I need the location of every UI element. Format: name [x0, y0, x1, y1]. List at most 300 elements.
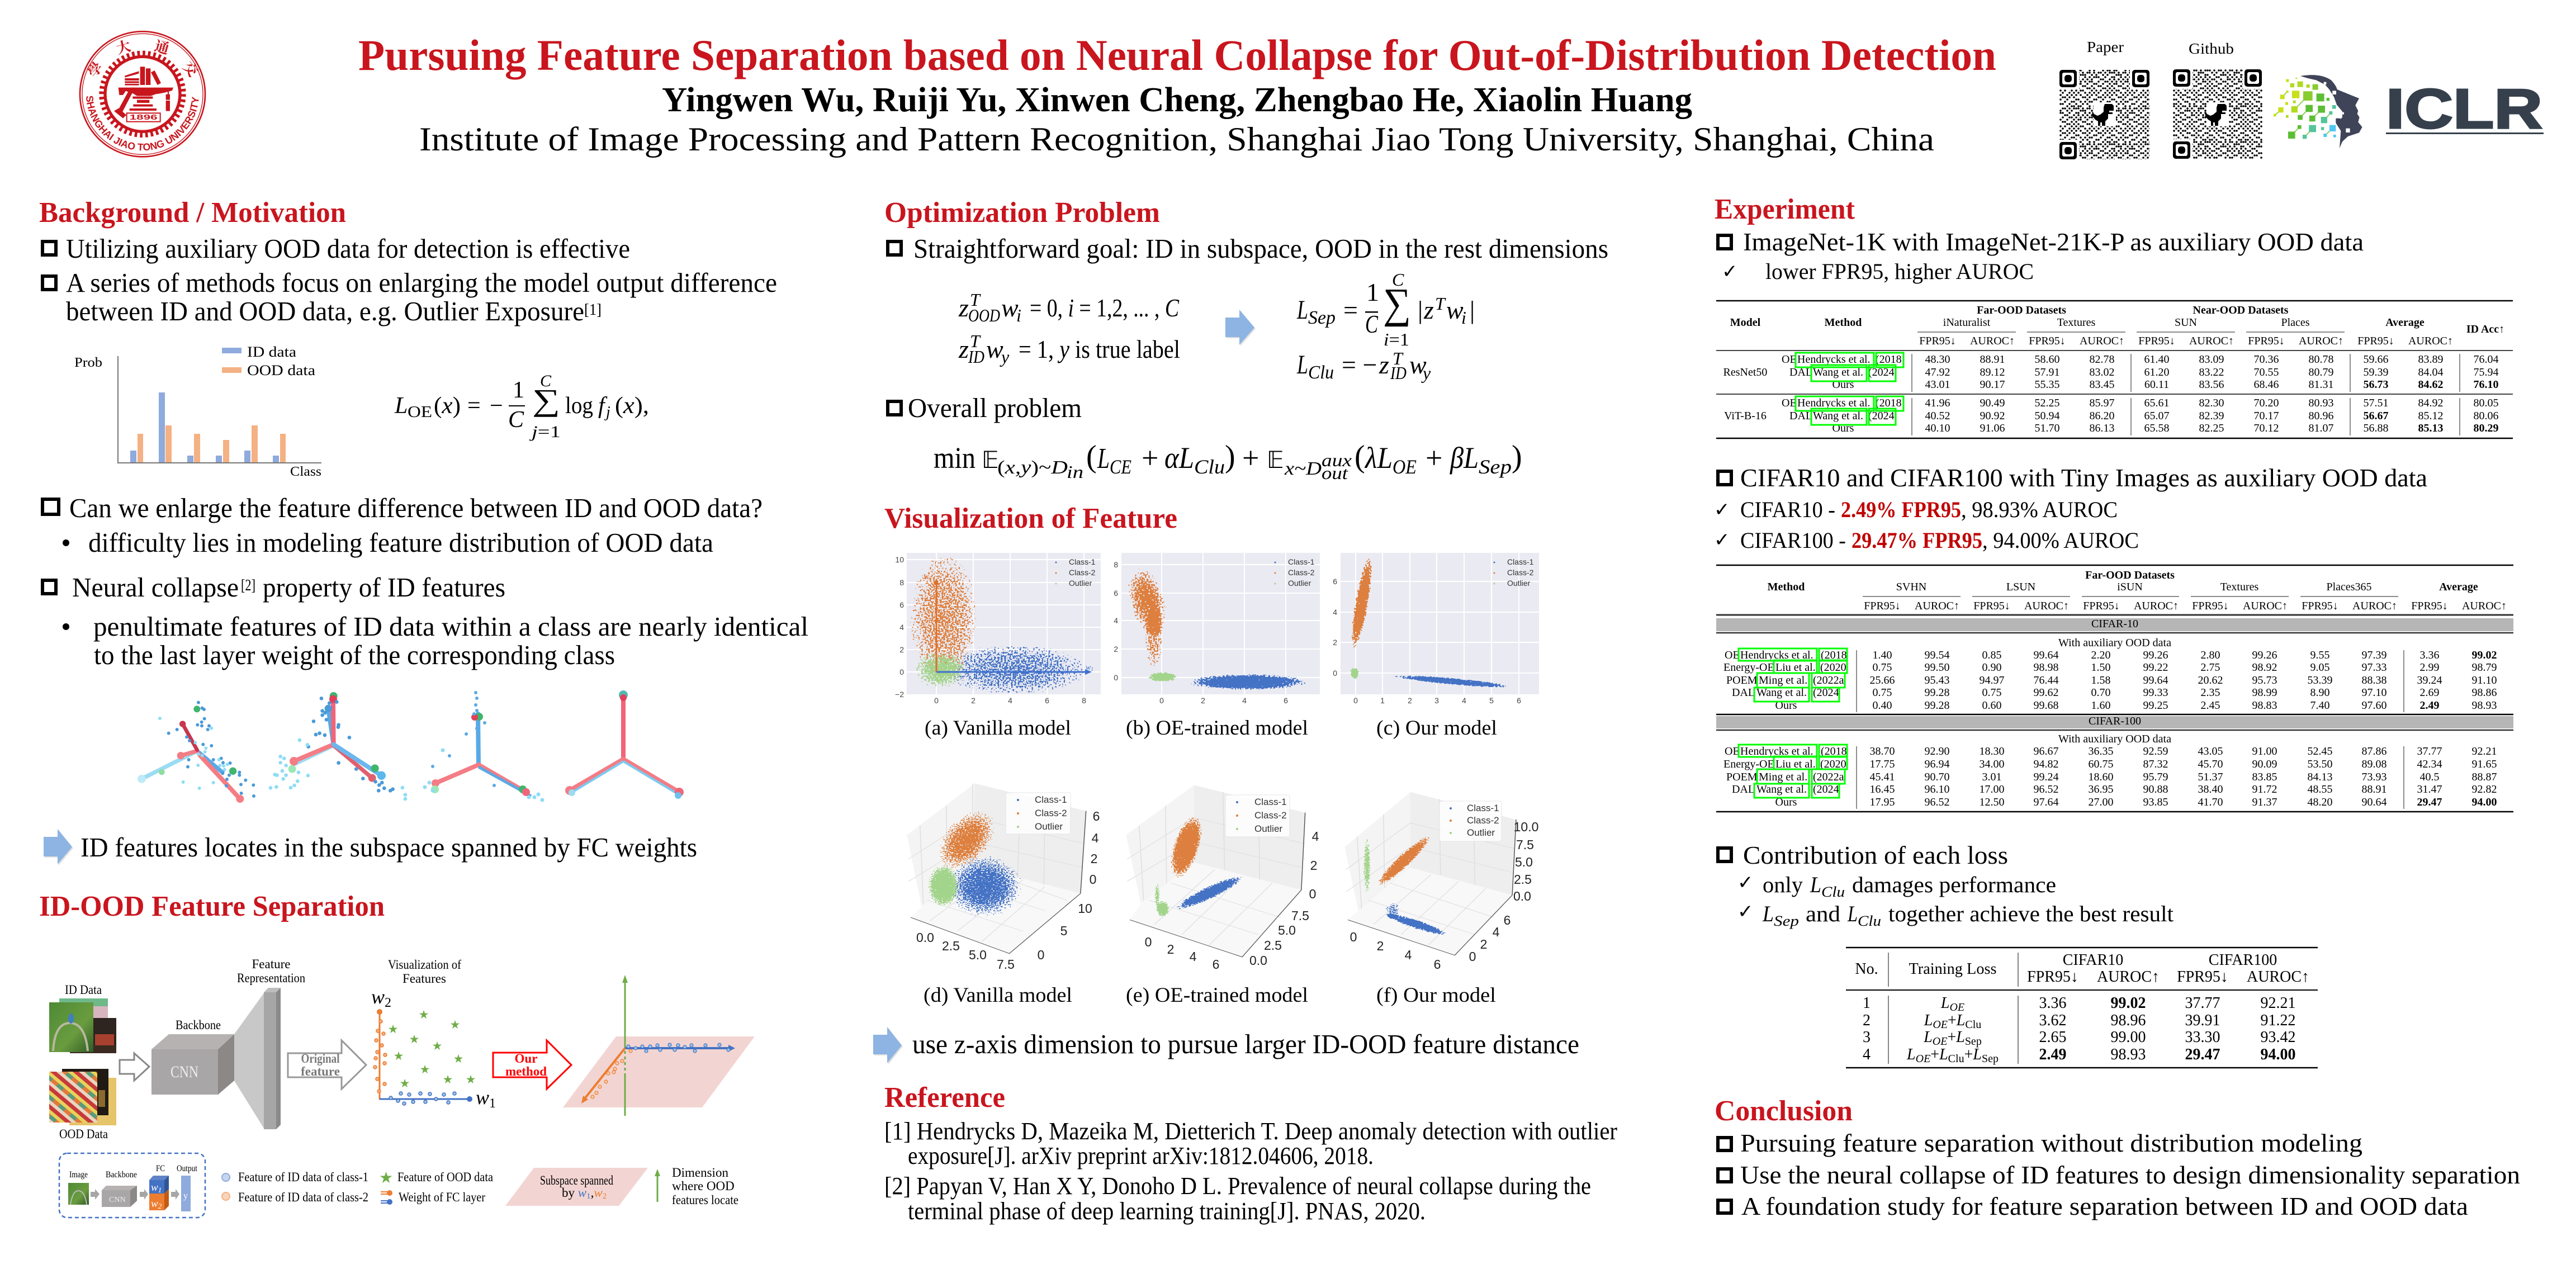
table: CIFAR results: 92.59 [2143, 745, 2168, 757]
logo: Shanghai Jiao Tong University seal: SHANGHAI JIAO TONG UNIVERSITY [86, 96, 199, 151]
bullet: series of methods: between ID and OOD data, e.g. Outlier Exposure [66, 296, 584, 326]
table: ImageNet results: 65.61 [2144, 397, 2169, 409]
chart: feature scatter with stars: ★ [419, 1008, 429, 1021]
table: CIFAR results: 41.70 [2198, 796, 2223, 808]
table: ImageNet results: 56.88 [2364, 422, 2388, 434]
table: ImageNet results: 57.51 [2364, 397, 2388, 409]
table: ImageNet results: (2018 [1876, 353, 1902, 366]
table: ImageNet results: 80.06 [2473, 410, 2499, 422]
3D scatter plot d: vanilla: 2 [1091, 851, 1097, 866]
legend entry: OOD dimension: where OOD [672, 1179, 735, 1193]
table: ImageNet results: AUROC↑ [2408, 335, 2453, 347]
table: ImageNet results: Model [1730, 316, 1761, 329]
table: ImageNet results: 41.96 [1925, 397, 1950, 409]
table: CIFAR results: 2.75 [2200, 661, 2220, 674]
legend entry: subspace: w [594, 1186, 603, 1200]
table: CIFAR results: With auxiliary OOD data [2058, 637, 2171, 649]
formula: L_OE: log [565, 393, 593, 419]
legend entry: subspace: 2 [603, 1192, 607, 1201]
table: loss contribution: Clu [1948, 1053, 1964, 1065]
label: OOD Data: OOD Data [59, 1127, 108, 1141]
figure: neural collapse tripods [138, 690, 684, 803]
3D scatter plot e: OE-trained: Class-1 [1254, 797, 1287, 807]
bullet: series of methods: A series of methods focus on enlarging the model output difference [66, 267, 777, 298]
table: CIFAR results: 94.82 [2034, 758, 2058, 770]
table: loss contribution: 37.77 [2185, 995, 2220, 1012]
inset: network structure: w [151, 1198, 158, 1210]
table: CIFAR results: 96.52 [1924, 796, 1950, 808]
scatter plot a: vanilla: 6 [899, 600, 904, 609]
table: CIFAR results: 38.70 [1869, 745, 1895, 757]
table: CIFAR results: 92.82 [2472, 783, 2497, 795]
formula: ID constraint: w [986, 335, 1003, 363]
label: Feature Representation [237, 957, 305, 985]
table: CIFAR results: OE [1725, 745, 1740, 757]
table: CIFAR results: AUROC↑ [2352, 600, 2397, 612]
formula: L_OE: j=1 [529, 423, 561, 441]
3D scatter plot e: OE-trained: 0 [1309, 887, 1316, 901]
reference 2 [884, 1172, 1591, 1225]
scatter plot b: OE-trained: 6 [1284, 696, 1288, 705]
table: CIFAR results: 1.50 [2091, 661, 2111, 674]
check: CIFAR10 result: 2.49% FPR95 [1841, 497, 1961, 522]
tripod 3 [425, 693, 542, 800]
table: CIFAR results: FPR95↓ [1864, 600, 1901, 612]
formula: ID constraint: z [958, 335, 969, 363]
formula: ID constraint: y [1000, 347, 1010, 367]
table: CIFAR results: Ours [1775, 699, 1797, 712]
formula: L_OE: C [508, 407, 524, 433]
table: loss contribution: 39.91 [2185, 1012, 2220, 1029]
bullet: neural collapse [42, 572, 505, 603]
formula: L_OE: j [604, 404, 610, 421]
table: CIFAR results: 93.85 [2143, 796, 2168, 808]
table: CIFAR results: 37.77 [2417, 745, 2442, 757]
table: CIFAR results: 8.90 [2310, 686, 2330, 699]
formula: L_Sep: = [1343, 296, 1358, 324]
check: CIFAR100 result [1714, 528, 2139, 553]
formula: L_OE: (x), [615, 393, 649, 419]
table: loss contribution: L [1939, 1046, 1948, 1063]
table: CIFAR results: 2.49 [2419, 699, 2440, 712]
formula: L_OE: L [394, 393, 408, 419]
bullet: ImageNet: ImageNet-1K with ImageNet-21K-P as auxiliary OOD data [1743, 228, 2364, 256]
table: CIFAR results: 99.25 [2143, 699, 2168, 712]
table: loss contribution: 98.96 [2111, 1012, 2146, 1029]
scatter plot c: our model: 0 [1353, 696, 1358, 705]
table: CIFAR results: CIFAR-100 [2089, 715, 2141, 727]
table: CIFAR results: Ours [1775, 796, 1797, 808]
table: ImageNet results [1716, 301, 2513, 438]
table: ImageNet results: DAL [1789, 366, 1812, 378]
logo: Shanghai Jiao Tong University seal: 交 [179, 56, 204, 81]
table: CIFAR results: 0.70 [2091, 686, 2111, 699]
bullet: overall problem: Overall problem [908, 392, 1082, 423]
formula: L_Clu: ID [1390, 363, 1407, 383]
reference 1 [884, 1117, 1617, 1169]
table: CIFAR results: 94.00 [2472, 796, 2497, 808]
table: ImageNet results: 83.22 [2199, 366, 2224, 378]
table: CIFAR results: (2022a [1813, 771, 1844, 783]
table: CIFAR results: 7.40 [2310, 699, 2330, 712]
table: CIFAR results: AUROC↑ [2462, 600, 2507, 612]
table: loss contribution: Training Loss [1909, 960, 1997, 978]
table: CIFAR results: 36.95 [2089, 783, 2113, 795]
table: CIFAR results: Ming et al. [1759, 771, 1807, 783]
table: CIFAR results: 3.36 [2419, 649, 2440, 661]
table: CIFAR results: 98.92 [2252, 661, 2277, 674]
logo: ICLR head [2274, 75, 2362, 148]
formula: OOD constraint: i [1016, 305, 1021, 325]
formula: L_Clu: z [1379, 351, 1389, 379]
scatter plot b: OE-trained: 2 [1201, 696, 1205, 705]
table: CIFAR results: DAL [1732, 783, 1755, 795]
check: L_Sep and L_Clu [1737, 901, 2174, 929]
table: CIFAR results: Average [2439, 581, 2478, 593]
3D scatter plot e: OE-trained: 2 [1310, 858, 1317, 873]
legend entry: OOD dimension: Dimension [672, 1166, 728, 1180]
check: lower FPR95: lower FPR95, higher AUROC [1765, 259, 2034, 284]
formula: overall objective: ) [1225, 439, 1235, 474]
formula: overall objective: min [934, 441, 976, 475]
table: CIFAR results: DAL [1732, 686, 1755, 699]
check: CIFAR100 result: , 94.00% AUROC [1982, 528, 2139, 553]
table: CIFAR results: 0.75 [1982, 686, 2001, 699]
formula: OOD constraint [958, 290, 1180, 325]
check: CIFAR10 result: CIFAR10 - [1740, 497, 1835, 522]
table: CIFAR results: 0.40 [1873, 699, 1892, 712]
label: Feature Representation: Representation [237, 971, 305, 985]
table: ImageNet results: Near-OOD Datasets [2193, 304, 2289, 316]
reference 1: [1] Hendrycks D, Mazeika M, Dietterich T. Deep anomaly detection with outlier [884, 1117, 1617, 1145]
chart: feature scatter with stars: ★ [453, 1052, 463, 1066]
formula: L_Clu: y [1421, 363, 1431, 383]
scatter plot b: OE-trained: Class-2 [1288, 568, 1315, 577]
scatter plot c: our model: 5 [1489, 696, 1494, 705]
QR code: github [2172, 68, 2264, 160]
panel: Conclusion [1715, 1095, 2520, 1220]
table: ImageNet results: Ours [1832, 422, 1854, 434]
table: ImageNet results: 85.12 [2418, 410, 2443, 422]
table: ImageNet results: SUN [2175, 316, 2197, 329]
formula: overall objective: ( [1086, 439, 1097, 474]
scatter plot c: our model: 4 [1462, 696, 1466, 705]
table: CIFAR results: 45.70 [2198, 758, 2223, 770]
3D scatter plot f: our model: 4 [1493, 925, 1500, 939]
table: ImageNet results: 88.91 [1980, 353, 2005, 366]
3D scatter plot d: vanilla: 4 [1092, 831, 1099, 845]
table: ImageNet results: 82.30 [2199, 397, 2224, 409]
legend entries: features: ★ [379, 1168, 393, 1187]
arrow: hollow input [120, 1053, 149, 1081]
table: loss contribution: Sep [1965, 1035, 1982, 1048]
table: ImageNet results: 59.66 [2364, 353, 2388, 366]
table: CIFAR results: 97.39 [2361, 649, 2387, 661]
formula: L_OE: (x) [434, 393, 461, 419]
table: loss contribution: L [1955, 1029, 1965, 1046]
table: loss contribution: CIFAR10 [2063, 951, 2123, 969]
legend entry: subspace: Subspace spanned [540, 1173, 613, 1187]
table: CIFAR results: 99.50 [1924, 661, 1950, 674]
table: CIFAR results: 16.45 [1869, 783, 1895, 795]
table: ImageNet results: 76.04 [2473, 353, 2499, 366]
check: only L_Clu: ✓ [1737, 872, 1753, 894]
heading: ID-OOD Feature Separation [39, 891, 385, 922]
table: CIFAR results: 17.95 [1869, 796, 1895, 808]
scatter plot a: vanilla: w [924, 572, 929, 581]
check: CIFAR10 result: ✓ [1714, 499, 1730, 521]
table: CIFAR results: 91.72 [2252, 783, 2277, 795]
table: ImageNet results: Hendrycks et al. [1797, 353, 1871, 366]
formula: L_Sep: | [1470, 296, 1475, 324]
legend entry: OOD dimension: features locate [672, 1193, 738, 1207]
formula: L_Sep: C [1392, 269, 1404, 290]
table: ImageNet results: Wang et al. [1813, 410, 1863, 422]
formula: L_OE: f [598, 393, 608, 419]
formula: L_Clu: L [1296, 350, 1308, 380]
formula: overall objective: aux [1322, 450, 1352, 470]
3D scatter plot f: our model: Outlier [1467, 827, 1495, 838]
panel: Visualization of Feature [873, 503, 1579, 1064]
3D scatter plot d: vanilla: 2.5 [942, 939, 960, 953]
formula: overall objective: + [1142, 441, 1158, 475]
table: CIFAR results: 9.05 [2310, 661, 2330, 674]
table: CIFAR results: 38.40 [2198, 783, 2223, 795]
check: only L_Clu [1737, 872, 2056, 900]
table: ImageNet results: OE [1782, 353, 1797, 366]
title: Pursuing Feature Separation based on Neural Collapse for Out-of-Distribution Detection [358, 31, 1996, 79]
table: CIFAR results: 18.60 [2089, 771, 2113, 783]
table: ImageNet results: 56.67 [2364, 410, 2388, 422]
bullet: foundation study: A foundation study for feature separation between ID and OOD data [1741, 1192, 2468, 1220]
formula: overall objective: out [1322, 463, 1348, 483]
table: CIFAR results: 94.97 [1979, 674, 2005, 686]
inset: network structure: y [183, 1191, 188, 1201]
heading: Reference [884, 1082, 1005, 1114]
formula: L_Sep: T [1435, 293, 1446, 314]
3D scatter plot d: vanilla: 10 [1078, 901, 1092, 916]
table: ImageNet results: OE [1782, 397, 1797, 409]
logo: Shanghai Jiao Tong University seal [79, 31, 206, 158]
scatter plot a: vanilla: 2 [899, 645, 904, 654]
tripod 4 [565, 690, 684, 799]
3D scatter plot f: our model: 6 [1434, 957, 1441, 972]
table: CIFAR results: 99.62 [2034, 686, 2058, 699]
table: loss contribution [1846, 948, 2318, 1068]
table: CIFAR results: Energy-OE [1723, 661, 1774, 674]
logo: Shanghai Jiao Tong University seal: 通 [153, 35, 172, 58]
legend: pipeline key [59, 1153, 738, 1218]
table: CIFAR results: (2018 [1821, 745, 1847, 757]
table: CIFAR results: 99.24 [2034, 771, 2058, 783]
table: CIFAR results: 98.99 [2252, 686, 2277, 699]
table: CIFAR results: Ming et al. [1759, 674, 1807, 686]
table: CIFAR results: 95.79 [2143, 771, 2168, 783]
check: lower FPR95: ✓ [1722, 261, 1737, 283]
table: CIFAR results: 52.45 [2308, 745, 2332, 757]
table: CIFAR results: 99.28 [1924, 699, 1950, 712]
check: only L_Clu: L [1810, 872, 1821, 897]
3D scatter plot e: OE-trained: 4 [1312, 829, 1319, 844]
table: CIFAR results: 3.01 [1982, 771, 2001, 783]
arrow: subspace conclusion [44, 829, 73, 865]
table: ImageNet results: 89.12 [1980, 366, 2005, 378]
scatter plot a: vanilla: 6 [1045, 696, 1049, 705]
legend entry: subspace: by w [562, 1186, 586, 1200]
formula: L_Clu: Clu [1308, 362, 1334, 383]
formula: L_Sep: i=1 [1384, 329, 1409, 349]
table: ImageNet results: 90.17 [1980, 378, 2005, 391]
table: loss contribution: 3 [1863, 1029, 1871, 1046]
bar chart: class probabilities: Class [290, 465, 321, 479]
table: ImageNet results: 58.60 [2035, 353, 2059, 366]
formula: OOD constraint: = 0, i = 1,2, ... , C [1030, 293, 1180, 322]
table: loss contribution: + [1947, 1029, 1956, 1046]
table: ImageNet results: DAL [1789, 410, 1812, 422]
table: ImageNet results: 84.62 [2418, 378, 2443, 391]
label: ID Data: ID Data [65, 983, 102, 997]
table: loss contribution: Clu [1965, 1019, 1981, 1031]
chart: feature scatter with stars: 2 [385, 996, 391, 1010]
legend entries: features [222, 1168, 493, 1205]
table: CIFAR results: Far-OOD Datasets [2085, 569, 2175, 581]
formula: L_OE: − [490, 393, 503, 419]
heading: Conclusion [1715, 1095, 1853, 1127]
formula: overall objective: 𝔼 [1267, 446, 1284, 473]
logo: Shanghai Jiao Tong University seal: 1896 [130, 113, 158, 121]
reference 2: terminal phase of deep learning training[J]. PNAS, 2020. [908, 1197, 1426, 1225]
panel: Experiment [1714, 193, 2513, 1068]
table: CIFAR results: 2.20 [2091, 649, 2111, 661]
table: ImageNet results: 82.39 [2199, 410, 2224, 422]
table: CIFAR results: Places365 [2326, 581, 2372, 593]
table: CIFAR results: 99.26 [2252, 649, 2277, 661]
check: only L_Clu: damages performance [1852, 872, 2056, 897]
formula: L_Clu: T [1393, 348, 1404, 368]
formula: L_Clu [1296, 348, 1431, 383]
table: CIFAR results: 53.50 [2308, 758, 2332, 770]
table: CIFAR results: Hendrycks et al. [1740, 649, 1813, 661]
3D scatter plot e: OE-trained: 7.5 [1291, 908, 1309, 923]
table: loss contribution: L [1956, 1012, 1965, 1029]
chart: feature scatter with stars: ★ [420, 1063, 430, 1076]
table: CIFAR results: 90.88 [2143, 783, 2168, 795]
table: CIFAR results: 96.52 [2034, 783, 2058, 795]
text: ID features subspace: ID features locates in the subspace spanned by FC weights [80, 832, 697, 863]
table: CIFAR results: 17.75 [1869, 758, 1895, 770]
table: CIFAR results: AUROC↑ [1915, 600, 1959, 612]
table: CIFAR results: SVHN [1896, 581, 1926, 593]
table: CIFAR results: 97.60 [2361, 699, 2387, 712]
table: CIFAR results: 60.75 [2089, 758, 2113, 770]
table: CIFAR results: 99.68 [2034, 699, 2058, 712]
table: CIFAR results: Hendrycks et al. [1740, 745, 1813, 757]
table: CIFAR results: FPR95↓ [2192, 600, 2229, 612]
chart: feature scatter with stars [371, 986, 496, 1111]
table: ImageNet results: AUROC↑ [2299, 335, 2343, 347]
scatter plot b: OE-trained: 0 [1159, 696, 1164, 705]
table: loss contribution: 3.36 [2039, 995, 2066, 1012]
table: CIFAR results: 98.83 [2252, 699, 2277, 712]
formula: overall objective: in [1067, 462, 1083, 482]
scatter plot b: OE-trained: 4 [1114, 616, 1118, 625]
table: CIFAR results: 0.75 [1873, 661, 1892, 674]
formula: L_Sep: z [1423, 296, 1434, 324]
table: loss contribution: L [1923, 1029, 1933, 1046]
scatter plot a: vanilla: 4 [899, 623, 904, 632]
bar chart: class probabilities: Prob [74, 356, 102, 370]
logo: ICLR wordmark: ICLR [2386, 78, 2542, 140]
formula: L_Sep: 1 [1366, 278, 1379, 306]
table: CIFAR results: 98.86 [2472, 686, 2497, 699]
caption d: (d) Vanilla model [924, 984, 1072, 1007]
table: CIFAR results: 0.90 [1982, 661, 2001, 674]
formula: overall objective: αL [1164, 441, 1194, 475]
table: loss contribution: 4 [1863, 1046, 1871, 1063]
reference 2: [2] Papyan V, Han X Y, Donoho D L. Prevalence of neural collapse during the [884, 1172, 1591, 1200]
chart: feature scatter with stars: ★ [388, 1022, 398, 1036]
3D scatter plot d: vanilla: 0 [1038, 948, 1044, 962]
3D scatter plot e: OE-trained: Class-2 [1254, 810, 1287, 821]
3D scatter plot f: our model: 6 [1504, 913, 1510, 927]
check: L_Sep and L_Clu: ✓ [1737, 901, 1753, 923]
logo: Shanghai Jiao Tong University seal: 學 [81, 56, 107, 82]
table: ImageNet results: 55.35 [2035, 378, 2059, 391]
scatter plot c: our model: 3 [1434, 696, 1439, 705]
table: CIFAR results: 0.85 [1982, 649, 2001, 661]
table: ImageNet results: 43.01 [1925, 378, 1950, 391]
chart: feature scatter with stars: ★ [400, 1077, 410, 1090]
table: loss contribution: Sep [1982, 1053, 1999, 1065]
formula: overall objective: + [1242, 441, 1259, 475]
table: ImageNet results: 83.89 [2418, 353, 2443, 366]
table: CIFAR results: FPR95↓ [2302, 600, 2338, 612]
table: CIFAR results: 99.22 [2143, 661, 2168, 674]
table: CIFAR results: 91.65 [2472, 758, 2497, 770]
chart: feature scatter with stars: 1 [489, 1096, 496, 1111]
scatter plot c: our model: 0 [1333, 669, 1337, 678]
table: ImageNet results: (2024 [1868, 366, 1895, 378]
arrow: our method: method [505, 1064, 547, 1078]
bullet: CIFAR: CIFAR10 and CIFAR100 with Tiny Images as auxiliary OOD data [1740, 464, 2427, 492]
table: ImageNet results: 80.93 [2309, 397, 2333, 409]
table: ImageNet results: 70.17 [2254, 410, 2279, 422]
table: loss contribution: 99.02 [2111, 995, 2146, 1012]
table: loss contribution: + [1964, 1046, 1973, 1063]
table: CIFAR results: 9.55 [2310, 649, 2330, 661]
table: CIFAR results: 48.20 [2308, 796, 2332, 808]
label: Github: Github [2189, 40, 2234, 57]
formula: L_Sep: C [1365, 310, 1379, 338]
table: ImageNet results: ResNet50 [1723, 366, 1767, 378]
scatter plot a: vanilla: −2 [895, 690, 904, 699]
formula: L_Sep: ∑ [1383, 280, 1411, 327]
table: CIFAR results: 27.00 [2089, 796, 2113, 808]
formula: OOD constraint: w [1001, 293, 1019, 322]
table: CIFAR results: 25.66 [1869, 674, 1895, 686]
scatter plot a: vanilla: 2 [971, 696, 976, 705]
formula: L_OE: 1 [513, 377, 524, 403]
table: ImageNet results: 70.12 [2254, 422, 2279, 434]
text: z-axis dimension: use z-axis dimension to pursue larger ID-OOD feature distance [912, 1029, 1579, 1059]
table: ImageNet results: ViT-B-16 [1724, 410, 1767, 422]
3D scatter plot f: our model: 2 [1480, 937, 1487, 951]
table: CIFAR results: 88.91 [2361, 783, 2387, 795]
formula: overall objective: OE [1393, 456, 1417, 478]
arrow: goal to losses [1225, 310, 1256, 346]
scatter plot b: OE-trained: 4 [1242, 696, 1247, 705]
3D scatter plot f: our model: 0.0 [1513, 889, 1531, 903]
